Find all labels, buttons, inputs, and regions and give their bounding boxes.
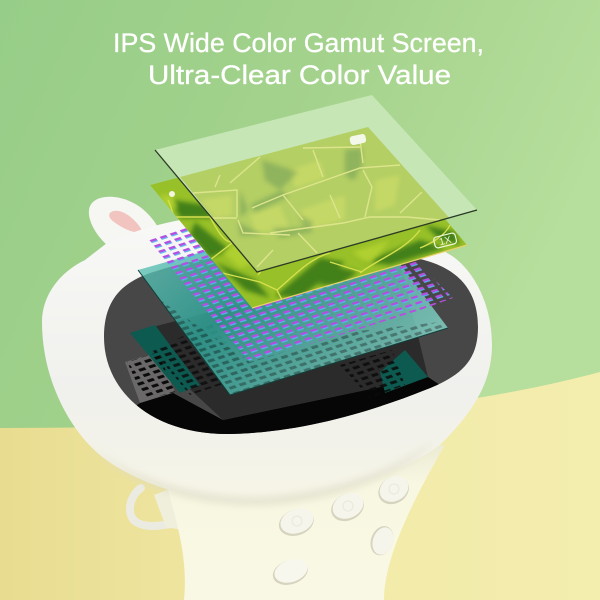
glass leaf shadows bbox=[238, 148, 362, 238]
body lower shading bbox=[85, 440, 435, 505]
title line 2: Ultra-Clear Color Value bbox=[148, 60, 451, 90]
leaf lower veins bbox=[168, 200, 450, 300]
rabbit ear bbox=[89, 197, 160, 246]
button: top middle bbox=[327, 488, 368, 526]
title bbox=[113, 28, 484, 90]
1X badge bbox=[433, 232, 457, 248]
black lower band bbox=[136, 377, 439, 434]
button: top right bbox=[373, 471, 414, 510]
leaf dark cells bbox=[172, 200, 460, 298]
teal glass layer bbox=[138, 208, 448, 395]
button: right lower bbox=[367, 523, 398, 559]
glass dark edge bbox=[155, 150, 477, 272]
screen layers bbox=[125, 321, 439, 434]
screen bbox=[104, 248, 478, 434]
device head body bbox=[42, 220, 492, 503]
button: bottom bbox=[270, 555, 311, 589]
1X badge: 1X bbox=[438, 235, 453, 248]
leaf bright cells bbox=[160, 195, 390, 268]
title line 1: IPS Wide Color Gamut Screen, bbox=[113, 28, 484, 58]
sun icon bbox=[169, 191, 175, 197]
dark pixels through teal bbox=[160, 300, 448, 395]
glass leaf veins bbox=[193, 140, 440, 267]
dark teal patches bbox=[130, 325, 200, 393]
device hook ring bbox=[130, 488, 182, 530]
dark layer bbox=[156, 321, 428, 420]
purple pixel grid bbox=[147, 226, 453, 362]
device handle bbox=[165, 445, 445, 600]
glass leaf yellow cells bbox=[200, 160, 400, 232]
device buttons bbox=[270, 471, 414, 589]
button: top left bbox=[275, 504, 318, 541]
background: yellow floor bbox=[0, 372, 600, 600]
ear inner pink bbox=[109, 211, 142, 232]
glass top layer bbox=[155, 95, 477, 272]
dark pixel grid bbox=[127, 352, 175, 400]
leaf warm lower edge bbox=[252, 245, 467, 308]
leaf through glass bbox=[180, 127, 460, 272]
teal layer lower edge bbox=[138, 270, 448, 395]
grey block bbox=[125, 352, 175, 403]
battery icon bbox=[350, 134, 366, 145]
leaf lower layer bbox=[150, 178, 466, 308]
background: green wall bbox=[0, 0, 600, 440]
